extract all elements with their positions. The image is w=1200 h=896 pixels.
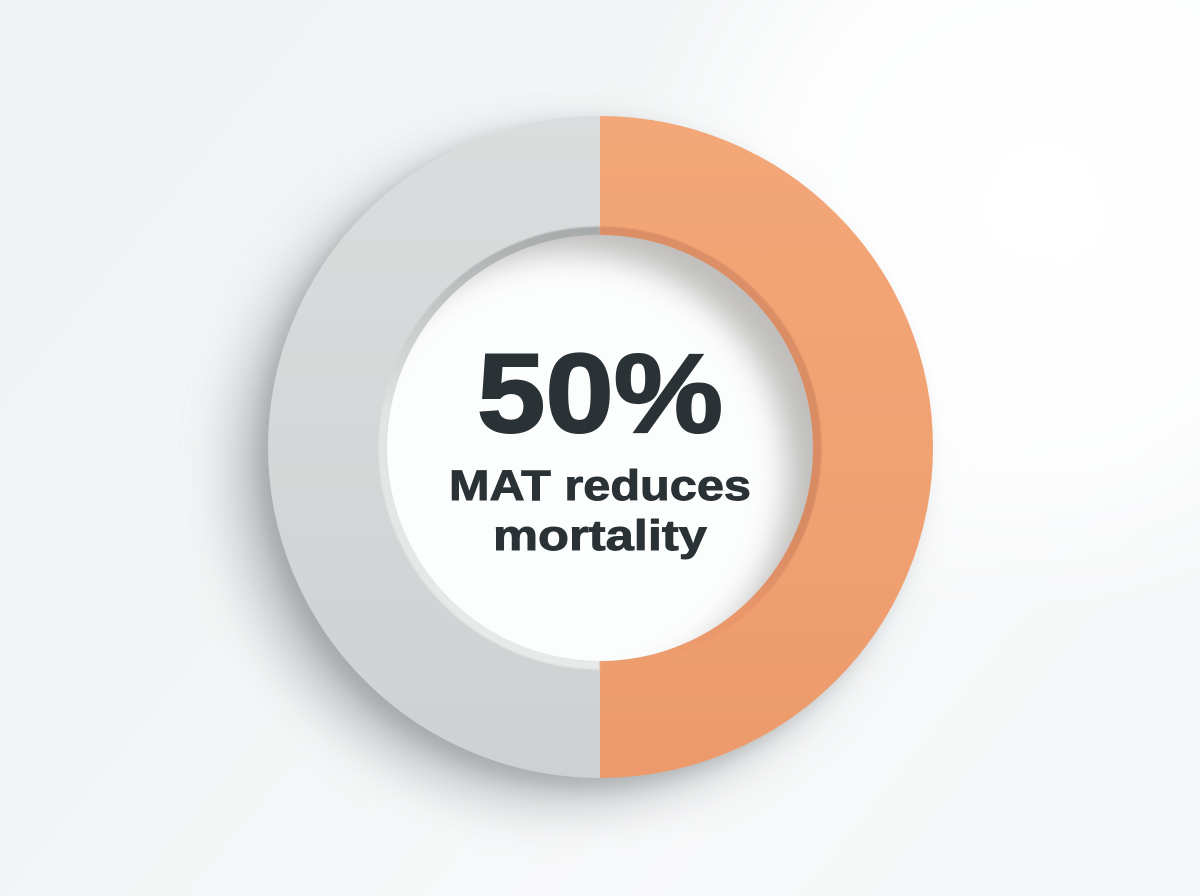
drop shadow (238, 124, 922, 800)
ring: orange half (600, 116, 933, 778)
big percentage: 50% (477, 331, 723, 456)
statistic text (449, 331, 751, 560)
caption: MAT reduces (449, 462, 751, 510)
caption (449, 462, 751, 560)
inner bevel: orange side (600, 231, 817, 665)
donut chart infographic (205, 0, 1200, 824)
ring: gray half (268, 116, 600, 778)
center hole (387, 235, 813, 661)
inner bevel: gray side (383, 231, 600, 665)
caption: mortality (493, 512, 707, 560)
